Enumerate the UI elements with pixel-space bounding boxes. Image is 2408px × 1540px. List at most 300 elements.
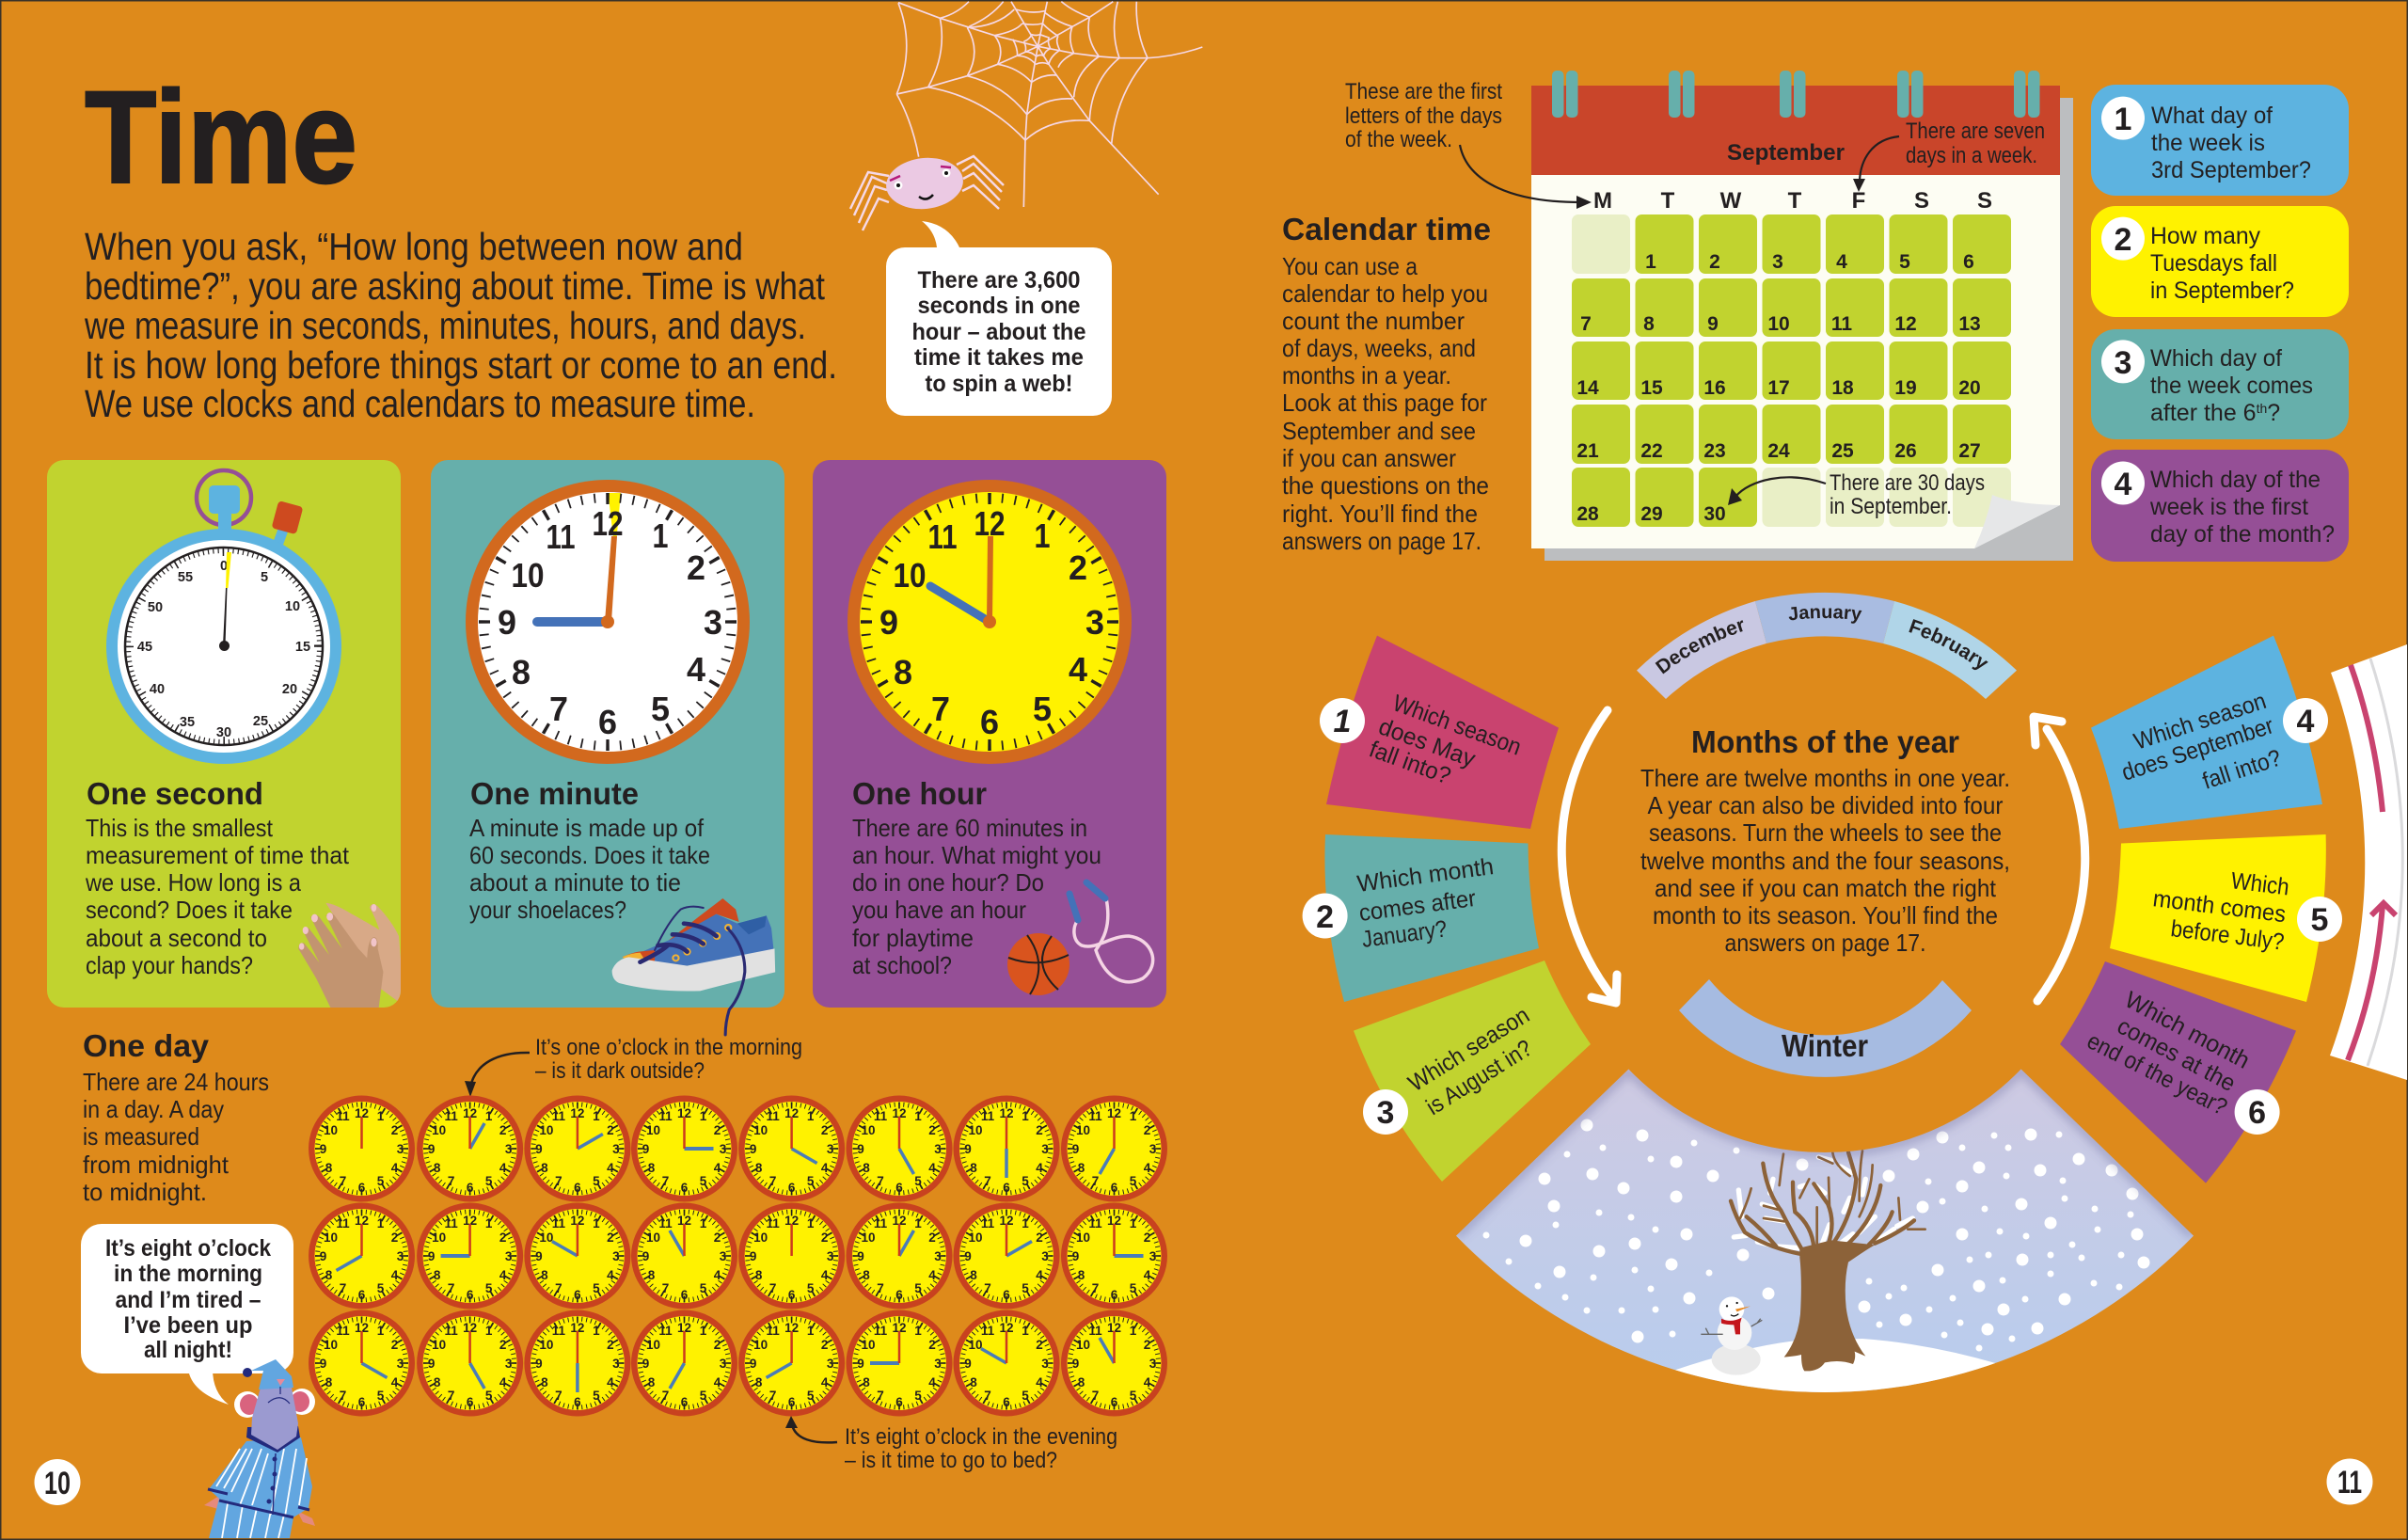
clock row: 4 to 11 o'clock: 6 xyxy=(574,1395,581,1409)
callout: one o'clock in the morning: It’s one o’clock in the morning xyxy=(535,1035,802,1060)
clock row: 8 to 3 o'clock: 4 xyxy=(714,1268,721,1282)
panel: calendar question 4: week is the first xyxy=(2149,494,2308,520)
clock row: 12 to 7 o'clock: 1 xyxy=(377,1109,385,1123)
clock row: 4 to 11 o'clock: 9 xyxy=(857,1357,864,1371)
clock row: 12 to 7 o'clock: 5 xyxy=(593,1174,600,1188)
heading: calendar time: Calendar time xyxy=(1282,212,1491,246)
arrow: left wheel direction xyxy=(1561,710,1617,1003)
clock row: 8 to 3 o'clock: 9 xyxy=(857,1249,864,1263)
clock row: 4 to 11 o'clock: 7 xyxy=(877,1389,884,1403)
clock row: 12 to 7 o'clock: 6 xyxy=(895,1181,903,1195)
heading: one minute: One minute xyxy=(470,776,639,811)
clock row: 8 to 3 o'clock: 4 xyxy=(928,1268,936,1282)
callout: mouse speech bubble: It’s eight o’clock xyxy=(105,1235,271,1262)
clock row: 8 to 3 o'clock: 9 xyxy=(535,1249,543,1263)
clock row: 4 to 11 o'clock: 3 xyxy=(397,1357,404,1371)
panel: wheel question 3: Which season xyxy=(1403,1002,1534,1097)
clock row: 12 to 7 o'clock: 6 xyxy=(681,1181,689,1195)
clock row: 8 to 3 o'clock: 2 xyxy=(1144,1230,1150,1245)
clock row: 12 to 7 o'clock: 5 xyxy=(914,1174,922,1188)
callout: 30 days in September xyxy=(1830,470,1985,519)
clock row: 4 to 11 o'clock: 9 xyxy=(428,1357,435,1371)
clock row: 12 to 7 o'clock: 3 xyxy=(1041,1142,1049,1156)
icon: stopwatch: 50 xyxy=(148,600,163,615)
icon: stopwatch: 20 xyxy=(282,682,297,697)
clock row: 4 to 11 o'clock: 11 xyxy=(874,1324,888,1338)
text: one day: There are 24 hours xyxy=(83,1068,269,1096)
clock row: 4 to 11 o'clock: 8 xyxy=(755,1375,763,1389)
panel: wheel question 3 xyxy=(1354,961,1591,1182)
clock row: 8 to 3 o'clock: 3 xyxy=(827,1249,834,1263)
date grid: 4 xyxy=(1836,251,1847,273)
clock row: 12 to 7 o'clock: 3 xyxy=(720,1142,727,1156)
date grid: 1 xyxy=(1645,251,1656,273)
clock row: 4 to 11 o'clock: 10 xyxy=(646,1338,660,1352)
text: one second: This is the smallest xyxy=(86,814,274,842)
text: months of the year: and see if you can match the right xyxy=(1655,874,1997,902)
clock row: 8 to 3 o'clock: 2 xyxy=(1036,1230,1043,1245)
panel: wheel question 5 xyxy=(2110,834,2342,1002)
clock row: 4 to 11 o'clock: 4 xyxy=(714,1375,721,1389)
callout: mouse speech bubble: I’ve been up xyxy=(124,1312,252,1339)
arrow: to weekday letters xyxy=(1460,145,1592,209)
clock row: 12 to 7 o'clock: 8 xyxy=(970,1161,977,1175)
panel: wheel question 2: Which month xyxy=(1355,853,1496,897)
clock row: 4 to 11 o'clock: 4 xyxy=(928,1375,936,1389)
panel: calendar question 3: ? xyxy=(2267,400,2280,426)
icon: spider web xyxy=(896,2,1202,207)
clock row: 4 to 11 o'clock: 11 xyxy=(444,1324,458,1338)
clock row: 4 to 11 o'clock: 4 xyxy=(1144,1375,1151,1389)
clock row: 4 to 11 o'clock: 10 xyxy=(539,1338,553,1352)
clock row: 4 to 11 o'clock: 4 xyxy=(391,1375,399,1389)
snowman xyxy=(1701,1296,1762,1375)
callout: first letters of the days: letters of the days xyxy=(1345,103,1502,129)
callout: spider speech bubble xyxy=(886,221,1112,416)
clock row: 8 to 3 o'clock: 5 xyxy=(377,1281,385,1295)
text: calendar time: You can use a xyxy=(1282,252,1418,280)
clock row: 12 to 7 o'clock: 7 xyxy=(662,1174,669,1188)
panel: calendar question 2: Tuesdays fall xyxy=(2150,250,2277,277)
clock row: 8 to 3 o'clock: 8 xyxy=(1078,1268,1085,1282)
icon: basketball xyxy=(1007,933,1069,995)
panel: wheel question 6: end of the year? xyxy=(2083,1027,2231,1120)
clock row: 12 to 7 o'clock: 4 xyxy=(499,1161,507,1175)
clock row: 12 to 7 o'clock: 3 xyxy=(397,1142,404,1156)
clock row: 8 to 3 o'clock: 10 xyxy=(968,1230,983,1245)
clock row: 12 to 7 o'clock: 10 xyxy=(432,1123,446,1137)
snowy ground xyxy=(1674,1339,1995,1392)
clock row: 12 to 7 o'clock: 6 xyxy=(467,1181,474,1195)
callout: spider speech bubble: time it takes me xyxy=(914,344,1084,371)
icon: yellow clock showing ten o'clock: 12 xyxy=(974,504,1005,543)
panel: calendar question 3: 3 xyxy=(2115,345,2131,381)
clock row: 4 to 11 o'clock: 12 xyxy=(570,1321,584,1335)
clock row: 12 to 7 o'clock: 1 xyxy=(1022,1109,1029,1123)
date grid: 19 xyxy=(1894,377,1917,399)
clock row: 8 to 3 o'clock: 1 xyxy=(700,1216,707,1230)
date grid: 22 xyxy=(1640,440,1663,462)
date grid: 28 xyxy=(1576,503,1599,525)
intro text: we measure in seconds, minutes, hours, and days. xyxy=(84,304,806,347)
weekday letters: S xyxy=(1914,188,1929,214)
clock row: 8 to 3 o'clock: 8 xyxy=(541,1268,548,1282)
clock row: 12 to 7 o'clock: 5 xyxy=(1022,1174,1029,1188)
clock row: 12 to 7 o'clock: 7 xyxy=(448,1174,454,1188)
date grid: 26 xyxy=(1894,440,1917,462)
date grid: 25 xyxy=(1831,440,1854,462)
clock row: 4 to 11 o'clock: 3 xyxy=(1041,1357,1049,1371)
clock row: 4 to 11 o'clock: 7 xyxy=(984,1389,991,1403)
clock row: 4 to 11 o'clock: 7 xyxy=(769,1389,776,1403)
clock row: 4 to 11 o'clock: 7 xyxy=(662,1389,669,1403)
clock row: 12 to 7 o'clock: 7 xyxy=(877,1174,884,1188)
date grid: 30 xyxy=(1703,503,1726,525)
clock row: 12 to 7 o'clock: 5 xyxy=(807,1174,815,1188)
chart: month wheel window: December xyxy=(1656,620,1744,674)
icon: white clock showing quarter to twelve: 5 xyxy=(651,690,670,728)
clock row: 12 to 7 o'clock: 9 xyxy=(535,1142,543,1156)
clock row: 8 to 3 o'clock: 12 xyxy=(892,1214,907,1228)
page curl xyxy=(1974,495,2060,548)
clock row: 12 to 7 o'clock: 7 xyxy=(769,1174,776,1188)
clock row: 4 to 11 o'clock: 4 xyxy=(821,1375,829,1389)
chart: month wheel window: January xyxy=(1789,606,1862,624)
panel: calendar question 3: after the 6 xyxy=(2150,400,2257,426)
text: months of the year: month to its season. You’ll find the xyxy=(1653,901,1998,929)
clock row: 4 to 11 o'clock: 5 xyxy=(485,1389,493,1403)
clock row: 4 to 11 o'clock: 1 xyxy=(1022,1324,1029,1338)
date grid: 15 xyxy=(1640,377,1663,399)
clock row: 12 to 7 o'clock: 9 xyxy=(1072,1142,1079,1156)
text: one hour: There are 60 minutes in xyxy=(852,814,1087,842)
panel: wheel question 6: Which month xyxy=(2120,987,2254,1074)
text: one second: we use. How long is a xyxy=(85,868,301,897)
clock row: 4 to 11 o'clock: 9 xyxy=(535,1357,543,1371)
clock row: 12 to 7 o'clock: 9 xyxy=(320,1142,326,1156)
callout: first letters of the days xyxy=(1345,79,1502,152)
clock row: 8 to 3 o'clock: 7 xyxy=(1092,1281,1099,1295)
clock row: 8 to 3 o'clock: 8 xyxy=(325,1268,333,1282)
clock row: 12 to 7 o'clock: 12 xyxy=(463,1106,477,1120)
panel: calendar question 1: the week is xyxy=(2151,130,2265,156)
clock row: 4 to 11 o'clock: 2 xyxy=(821,1338,828,1352)
clock row: 8 to 3 o'clock: 7 xyxy=(662,1281,669,1295)
clock row: 8 to 3 o'clock: 10 xyxy=(539,1230,553,1245)
arrow: to date 30 xyxy=(1728,477,1826,505)
icon: white clock showing quarter to twelve: 7 xyxy=(549,690,568,728)
clock row: 12 to 7 o'clock: 4 xyxy=(714,1161,721,1175)
page number: 11: 11 xyxy=(2337,1465,2362,1500)
panel: one second xyxy=(47,460,401,1008)
panel: calendar question 4: day of the month? xyxy=(2150,521,2335,548)
clock row: 12 to 7 o'clock: 2 xyxy=(1036,1123,1043,1137)
clock row: 12 to 7 o'clock: 4 xyxy=(607,1161,614,1175)
date grid: 12 xyxy=(1894,313,1917,335)
weekday letters: T xyxy=(1661,188,1675,214)
clock row: 8 to 3 o'clock: 12 xyxy=(999,1214,1014,1228)
text: one minute xyxy=(469,814,710,924)
text: one day xyxy=(83,1068,269,1206)
text: calendar time: calendar to help you xyxy=(1282,279,1488,308)
clock row: 4 to 11 o'clock: 10 xyxy=(968,1338,983,1352)
clock row: 12 to 7 o'clock: 4 xyxy=(928,1161,936,1175)
text: one hour: an hour. What might you xyxy=(852,841,1101,869)
clock row: 12 to 7 o'clock: 8 xyxy=(1078,1161,1085,1175)
clock row: 8 to 3 o'clock: 1 xyxy=(485,1216,493,1230)
clock row: 8 to 3 o'clock: 1 xyxy=(914,1216,922,1230)
clock row: 4 to 11 o'clock: 2 xyxy=(928,1338,936,1352)
clock row: 8 to 3 o'clock: 2 xyxy=(391,1230,398,1245)
icon: stopwatch: 40 xyxy=(150,682,165,697)
icon: mouse in pyjamas xyxy=(204,1359,315,1538)
clock row: 8 to 3 o'clock: 5 xyxy=(1130,1281,1137,1295)
icon: white clock showing quarter to twelve: 12 xyxy=(593,504,623,543)
weekday letters: F xyxy=(1852,188,1865,214)
clock row: 8 to 3 o'clock: 9 xyxy=(964,1249,972,1263)
clock row: 12 to 7 o'clock: 6 xyxy=(1111,1181,1118,1195)
clock row: 12 to 7 o'clock: 3 xyxy=(505,1142,513,1156)
clock row: 4 to 11 o'clock: 9 xyxy=(642,1357,649,1371)
icon: stopwatch: 0 xyxy=(220,559,228,574)
clock row: 12 to 7 o'clock: 11 xyxy=(444,1109,458,1123)
icon: white clock showing quarter to twelve: 8 xyxy=(512,653,531,691)
clock row: 4 to 11 o'clock: 7 xyxy=(340,1389,346,1403)
clock row: 12 to 7 o'clock: 7 xyxy=(984,1174,991,1188)
clock row: 4 to 11 o'clock: 11 xyxy=(552,1324,566,1338)
clock row: 4 to 11 o'clock: 6 xyxy=(467,1395,474,1409)
clock row: 4 to 11 o'clock: 9 xyxy=(1072,1357,1079,1371)
panel: calendar question 2: How many xyxy=(2150,223,2260,249)
text: calendar time: September and see xyxy=(1282,417,1476,445)
clock row: 4 to 11 o'clock: 3 xyxy=(934,1357,942,1371)
clock row: 8 to 3 o'clock: 6 xyxy=(574,1288,581,1302)
clock row: 4 to 11 o'clock: 11 xyxy=(766,1324,780,1338)
clock row: 4 to 11 o'clock: 5 xyxy=(914,1389,922,1403)
clock row: 8 to 3 o'clock: 8 xyxy=(434,1268,441,1282)
clock row: 8 to 3 o'clock: 5 xyxy=(700,1281,707,1295)
clock row: 8 to 3 o'clock: 4 xyxy=(499,1268,507,1282)
clock row: 12 to 7 o'clock: 4 xyxy=(1144,1161,1151,1175)
clock row: 8 to 3 o'clock: 2 xyxy=(928,1230,936,1245)
text: calendar time: if you can answer xyxy=(1282,444,1456,472)
clock row: 12 to 7 o'clock: 1 xyxy=(593,1109,600,1123)
clock row: 8 to 3 o'clock: 9 xyxy=(320,1249,326,1263)
clock row: 4 to 11 o'clock: 8 xyxy=(863,1375,870,1389)
clock row: 4 to 11 o'clock: 8 xyxy=(541,1375,548,1389)
panel: wheel question 4: fall into? xyxy=(2199,745,2285,795)
panel: wheel question 3: 3 xyxy=(1377,1095,1394,1131)
clock row: 8 to 3 o'clock: 1 xyxy=(1130,1216,1137,1230)
icon: stopwatch: 10 xyxy=(285,599,300,614)
callout: seven days in a week xyxy=(1906,119,2045,168)
callout: mouse speech bubble xyxy=(81,1224,293,1405)
clock row: 8 to 3 o'clock: 11 xyxy=(444,1216,458,1230)
date grid: 18 xyxy=(1831,377,1854,399)
clock row: 8 to 3 o'clock: 4 xyxy=(391,1268,399,1282)
clock row: 12 to 7 o'clock: 5 xyxy=(485,1174,493,1188)
text: one minute: your shoelaces? xyxy=(469,896,626,924)
date grid: 10 xyxy=(1767,313,1790,335)
month name: September xyxy=(1727,140,1845,166)
clock row: 4 to 11 o'clock: 12 xyxy=(355,1321,369,1335)
clock row: 4 to 11 o'clock: 8 xyxy=(1078,1375,1085,1389)
panel: wheel question 6: 6 xyxy=(2248,1095,2266,1131)
clock row: 12 to 7 o'clock: 12 xyxy=(999,1106,1014,1120)
clock row: 4 to 11 o'clock: 12 xyxy=(1107,1321,1121,1335)
clock row: 4 to 11 o'clock: 4 xyxy=(1036,1375,1043,1389)
clock row: 12 to 7 o'clock: 3 xyxy=(827,1142,834,1156)
text: calendar time: Look at this page for xyxy=(1282,389,1487,417)
clock row: 12 to 7 o'clock: 9 xyxy=(750,1142,756,1156)
clock row: 12 to 7 o'clock: 2 xyxy=(499,1123,506,1137)
tree xyxy=(1731,1151,1925,1371)
icon: yellow clock showing ten o'clock xyxy=(848,480,1132,764)
icon: stopwatch xyxy=(106,470,341,764)
panel: calendar question 3: the week comes xyxy=(2150,373,2313,399)
text: one hour: do in one hour? Do xyxy=(852,868,1044,897)
clock row: 8 to 3 o'clock: 11 xyxy=(874,1216,888,1230)
clock row: 8 to 3 o'clock: 6 xyxy=(895,1288,903,1302)
text: one second: measurement of time that xyxy=(86,841,350,869)
panel: one hour xyxy=(813,460,1166,1008)
clock row: 12 to 7 o'clock: 6 xyxy=(788,1181,796,1195)
clock row: 4 to 11 o'clock: 2 xyxy=(1036,1338,1043,1352)
clock row: 4 to 11 o'clock: 5 xyxy=(593,1389,600,1403)
clock row: 4 to 11 o'clock: 12 xyxy=(999,1321,1014,1335)
clock row: 12 to 7 o'clock: 9 xyxy=(857,1142,864,1156)
icon: yellow clock showing ten o'clock: 6 xyxy=(980,703,999,741)
clock row: 12 to 7 o'clock: 6 xyxy=(574,1181,581,1195)
panel: wheel question 5: month comes xyxy=(2151,885,2288,928)
clock row: 12 to 7 o'clock: 9 xyxy=(642,1142,649,1156)
text: one second: clap your hands? xyxy=(86,951,253,979)
clock row: 4 to 11 o'clock: 3 xyxy=(505,1357,513,1371)
clock row: 12 to 7 o'clock: 4 xyxy=(1036,1161,1043,1175)
panel: one minute xyxy=(431,460,784,1035)
clock row: 8 to 3 o'clock: 11 xyxy=(981,1216,995,1230)
callout: eight o'clock in the evening: – is it time to go to bed? xyxy=(845,1448,1057,1473)
text: calendar time: answers on page 17. xyxy=(1282,527,1481,555)
clock row: 12 to 7 o'clock: 1 xyxy=(807,1109,815,1123)
date grid: 5 xyxy=(1899,251,1910,273)
intro text: It is how long before things start or come to an end. xyxy=(85,343,837,387)
clock row: 12 to 7 o'clock: 12 xyxy=(892,1106,907,1120)
chart: 24 clocks for one day xyxy=(309,1095,1167,1417)
panel: calendar question 1: 3rd September? xyxy=(2151,157,2311,183)
date grid: 21 xyxy=(1576,440,1599,462)
callout: mouse speech bubble: and I’m tired – xyxy=(115,1287,261,1313)
heading: one hour: One hour xyxy=(852,776,987,811)
wheel edge with direction arrow xyxy=(2330,644,2407,1080)
clock row: 4 to 11 o'clock: 2 xyxy=(391,1338,398,1352)
panel: calendar question 1 xyxy=(2091,85,2349,196)
clock row: 8 to 3 o'clock: 3 xyxy=(1041,1249,1049,1263)
panel: wheel question 2: January? xyxy=(1360,915,1449,953)
clock row: 4 to 11 o'clock: 10 xyxy=(432,1338,446,1352)
clock row: 4 to 11 o'clock: 1 xyxy=(1130,1324,1137,1338)
panel: wheel question 4: does September xyxy=(2118,712,2277,786)
clock row: 8 to 3 o'clock: 6 xyxy=(358,1288,366,1302)
clock row: 8 to 3 o'clock: 10 xyxy=(861,1230,876,1245)
clock row: 4 to 11 o'clock: 6 xyxy=(681,1395,689,1409)
panel: calendar question 2: 2 xyxy=(2115,222,2131,258)
page number: 11 xyxy=(2327,1458,2372,1505)
clock row: 8 to 3 o'clock: 3 xyxy=(612,1249,620,1263)
clock row: 4 to 11 o'clock: 11 xyxy=(1088,1324,1102,1338)
text: one hour xyxy=(852,814,1101,979)
icon: stopwatch: 30 xyxy=(216,725,231,740)
panel: wheel question 1: fall into? xyxy=(1366,736,1454,789)
text: one hour: at school? xyxy=(852,951,952,979)
callout: 30 days in September: in September. xyxy=(1830,494,1952,519)
clock row: 8 to 3 o'clock: 2 xyxy=(607,1230,614,1245)
callout: one o'clock in the morning xyxy=(465,1035,802,1097)
panel: wheel question 2: comes after xyxy=(1357,885,1478,927)
callout: 30 days in September: There are 30 days xyxy=(1830,470,1985,496)
clock row: 12 to 7 o'clock: 11 xyxy=(552,1109,566,1123)
clock row: 4 to 11 o'clock: 3 xyxy=(827,1357,834,1371)
season window: winter: Winter xyxy=(1782,1028,1868,1063)
clock row: 8 to 3 o'clock: 3 xyxy=(505,1249,513,1263)
panel: calendar question 3: Which day of xyxy=(2150,345,2282,372)
clock row: 12 to 7 o'clock: 12 xyxy=(355,1106,369,1120)
weekday letters: T xyxy=(1788,188,1802,214)
text: one second xyxy=(85,814,350,979)
date grid: 7 xyxy=(1580,313,1592,335)
clock row: 4 to 11 o'clock: 6 xyxy=(358,1395,366,1409)
clock row: 12 to 7 o'clock: 2 xyxy=(714,1123,721,1137)
clock row: 8 to 3 o'clock: 5 xyxy=(807,1281,815,1295)
icon: stopwatch: 35 xyxy=(180,715,195,730)
clock row: 12 to 7 o'clock: 6 xyxy=(1003,1181,1010,1195)
clock row: 4 to 11 o'clock: 1 xyxy=(807,1324,815,1338)
icon: yellow clock showing ten o'clock: 3 xyxy=(1085,603,1104,642)
clock row: 12 to 7 o'clock: 10 xyxy=(1076,1123,1090,1137)
clock row: 4 to 11 o'clock: 3 xyxy=(720,1357,727,1371)
clock row: 8 to 3 o'clock: 9 xyxy=(428,1249,435,1263)
clock row: 8 to 3 o'clock: 2 xyxy=(714,1230,721,1245)
clock row: 4 to 11 o'clock: 1 xyxy=(485,1324,493,1338)
clock row: 12 to 7 o'clock: 6 xyxy=(358,1181,366,1195)
page number: 10 xyxy=(34,1459,81,1505)
page number: 10: 10 xyxy=(44,1466,71,1501)
callout: eight o'clock in the evening xyxy=(785,1416,1117,1473)
icon: yellow clock showing ten o'clock: 9 xyxy=(879,603,898,642)
clock row: 8 to 3 o'clock: 6 xyxy=(1111,1288,1118,1302)
heading: months of the year: Months of the year xyxy=(1691,724,1959,759)
panel: wheel question 1: Which season xyxy=(1389,690,1525,761)
panel: calendar question 2: in September? xyxy=(2150,278,2294,304)
panel: wheel question 5: 5 xyxy=(2311,902,2328,938)
clock row: 8 to 3 o'clock: 1 xyxy=(1022,1216,1029,1230)
clock row: 8 to 3 o'clock: 9 xyxy=(1072,1249,1079,1263)
icon: white clock showing quarter to twelve: 1 xyxy=(653,516,668,555)
date grid: 16 xyxy=(1703,377,1726,399)
clock row: 4 to 11 o'clock: 7 xyxy=(448,1389,454,1403)
clock row: 12 to 7 o'clock: 8 xyxy=(541,1161,548,1175)
intro text: When you ask, “How long between now and xyxy=(85,225,743,268)
clock row: 8 to 3 o'clock: 3 xyxy=(397,1249,404,1263)
clock row: 8 to 3 o'clock: 12 xyxy=(784,1214,799,1228)
date grid: 27 xyxy=(1958,440,1981,462)
heading: one day: One day xyxy=(83,1028,210,1063)
text: calendar time: of days, weeks, and xyxy=(1282,334,1476,362)
panel: wheel question 3: is August in? xyxy=(1421,1035,1537,1120)
clock row: 12 to 7 o'clock: 10 xyxy=(968,1123,983,1137)
text: one day: is measured xyxy=(83,1122,199,1151)
date grid: 20 xyxy=(1958,377,1981,399)
